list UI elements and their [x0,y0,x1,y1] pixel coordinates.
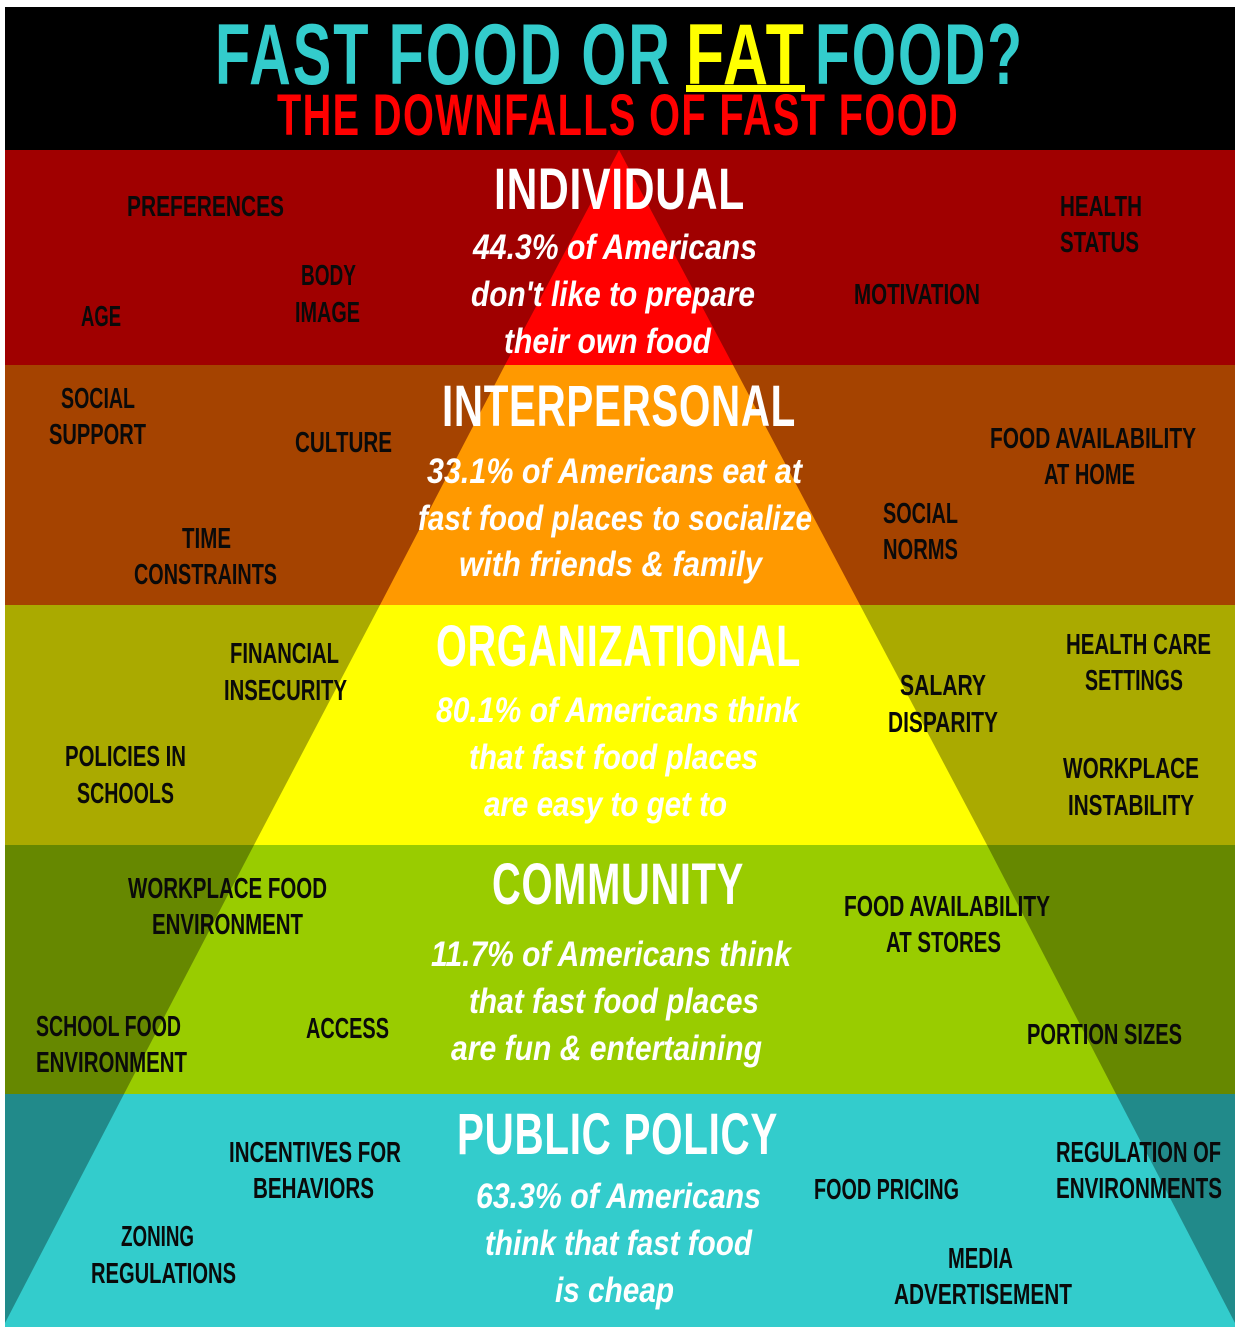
title: FAST FOOD OR [215,7,672,103]
level: individual: BODY [301,260,356,292]
level: interpersonal: SOCIAL [883,498,958,530]
level: community: ENVIRONMENT [36,1047,187,1079]
level: organizational: that fast food places [469,738,758,777]
level: interpersonal: CONSTRAINTS [134,559,277,591]
level: individual: HEALTH [1060,191,1142,223]
level: public policy: is cheap [555,1271,674,1310]
header banner [5,7,1235,150]
level: organizational: SCHOOLS [77,778,174,810]
level: public policy: think that fast food [485,1224,753,1263]
level: community: ENVIRONMENT [152,909,303,941]
level: interpersonal: fast food places to socialize [418,499,812,538]
level: organizational: FINANCIAL [230,638,339,670]
level: community [36,852,1182,1079]
level: community: WORKPLACE FOOD [128,873,327,905]
level: interpersonal: TIME [182,523,231,555]
level: public policy [91,1102,1222,1311]
level: interpersonal [49,374,1196,591]
level: individual: 44.3% of Americans [472,228,757,267]
level: individual: IMAGE [295,297,360,329]
level: community: COMMUNITY [492,852,744,917]
level: individual: don't like to prepare [471,275,755,314]
level: interpersonal: AT HOME [1044,459,1135,491]
level: community: FOOD AVAILABILITY [844,891,1050,923]
level: community: 11.7% of Americans think [431,935,792,974]
level: public policy: MEDIA [948,1243,1013,1275]
level: organizational: POLICIES IN [65,741,186,773]
level: organizational: SETTINGS [1085,665,1183,697]
level: individual: MOTIVATION [854,279,980,311]
level: public policy: ADVERTISEMENT [894,1279,1072,1311]
title: FAT [686,7,806,103]
level: individual [81,157,1142,361]
level: individual: PREFERENCES [127,191,284,223]
level: public policy: INCENTIVES FOR [229,1137,401,1169]
level: community: SCHOOL FOOD [36,1011,181,1043]
level: organizational: ORGANIZATIONAL [436,614,801,679]
level: organizational [65,614,1211,824]
level: interpersonal: SUPPORT [49,419,146,451]
level: public policy: 63.3% of Americans [476,1177,761,1216]
level: interpersonal: CULTURE [295,427,392,459]
level: individual: AGE [81,301,121,333]
level: community: are fun & entertaining [451,1029,762,1068]
level: interpersonal: NORMS [883,534,958,566]
level: public policy: FOOD PRICING [814,1174,959,1206]
level: interpersonal: 33.1% of Americans eat at [427,452,803,491]
level: community: ACCESS [306,1013,389,1045]
level: organizational: 80.1% of Americans think [436,691,800,730]
level: interpersonal: with friends & family [459,545,763,584]
level: interpersonal: SOCIAL [61,383,135,415]
level: public policy: PUBLIC POLICY [457,1102,778,1167]
level: organizational: are easy to get to [484,785,727,824]
level: public policy: ZONING [121,1221,194,1253]
level: public policy: REGULATIONS [91,1258,236,1290]
level: individual: INDIVIDUAL [494,157,745,222]
level: individual: their own food [504,322,712,361]
level: public policy: BEHAVIORS [253,1173,374,1205]
level: individual: STATUS [1060,227,1139,259]
level: organizational: DISPARITY [888,707,998,739]
level: interpersonal: INTERPERSONAL [442,374,796,439]
level: organizational: SALARY [900,670,986,702]
level: organizational: INSECURITY [224,675,347,707]
title: FOOD? [815,7,1024,103]
level: community: that fast food places [469,982,759,1021]
level: community: AT STORES [886,927,1001,959]
